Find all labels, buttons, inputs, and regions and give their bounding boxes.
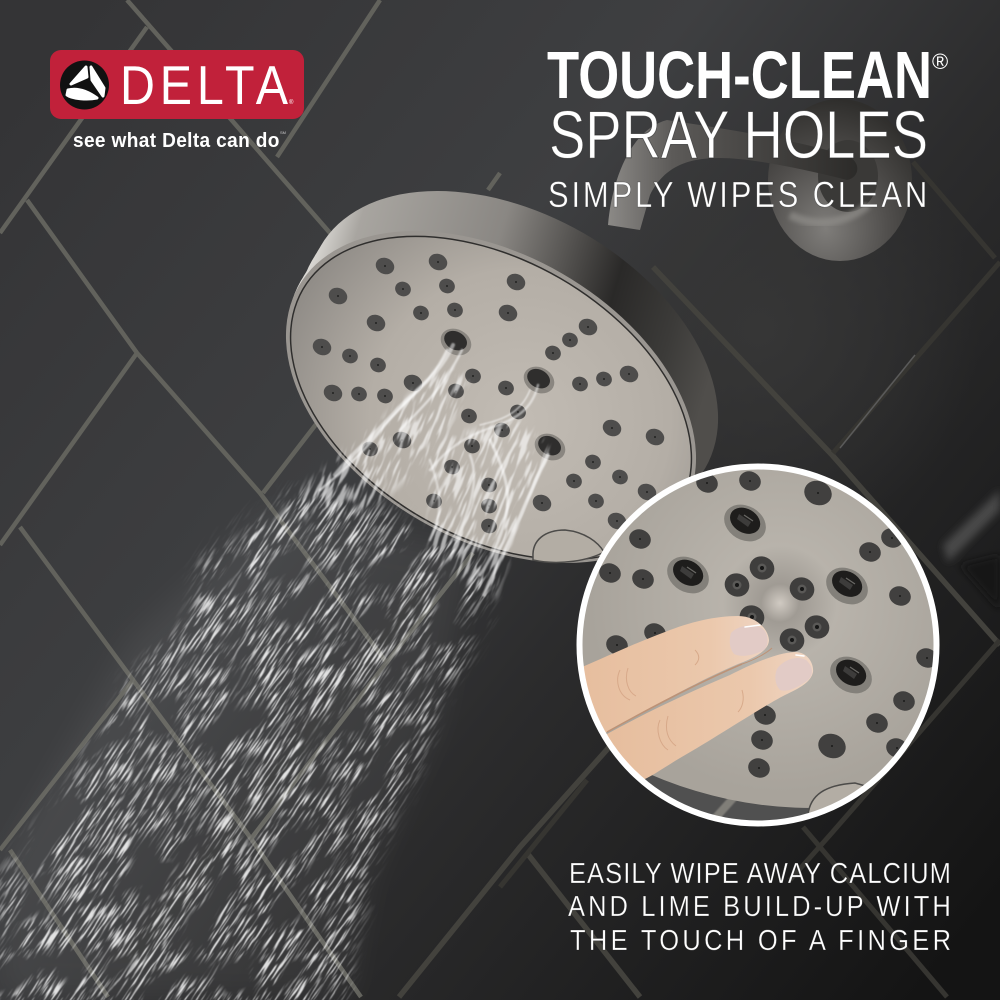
fingers — [584, 616, 814, 779]
fingernails — [730, 626, 768, 656]
logo emblem — [60, 60, 109, 110]
Delta logo: ® — [289, 99, 294, 106]
inset holes — [596, 468, 941, 781]
title: ® — [932, 49, 948, 74]
shower head — [227, 163, 755, 631]
head face — [227, 163, 755, 631]
pause button tab — [533, 530, 604, 562]
wall corner highlight — [943, 490, 1000, 610]
Delta logo — [50, 50, 304, 152]
title: SIMPLY WIPES CLEAN — [548, 176, 927, 216]
shower arm and wall flange — [608, 99, 912, 261]
lower finger — [606, 652, 814, 779]
inset white border — [580, 466, 936, 824]
spray droplets — [0, 481, 498, 1000]
inset face — [399, 175, 1000, 865]
caption: EASILY WIPE AWAY CALCIUM — [569, 856, 951, 889]
upper finger — [584, 616, 769, 732]
spray haze — [0, 510, 470, 997]
logo tagline: see what Delta can do — [73, 129, 279, 152]
head body rim — [288, 191, 718, 558]
inset dark wall below face — [645, 775, 808, 820]
jet droplets — [298, 368, 551, 602]
near-head water jets — [320, 345, 548, 595]
title — [547, 38, 948, 216]
inset circle: finger wiping spray holes — [576, 464, 940, 826]
knuckle wrinkles — [618, 650, 743, 750]
logo wordmark: DELTA — [120, 54, 288, 116]
Delta logo: SM — [280, 130, 286, 135]
logo badge — [50, 50, 304, 119]
spray holes — [310, 251, 667, 536]
caption — [568, 856, 951, 956]
caption: THE TOUCH OF A FINGER — [570, 923, 951, 956]
inset pause tab — [808, 782, 864, 813]
water spray — [0, 342, 551, 1000]
caption: AND LIME BUILD-UP WITH — [568, 889, 951, 922]
